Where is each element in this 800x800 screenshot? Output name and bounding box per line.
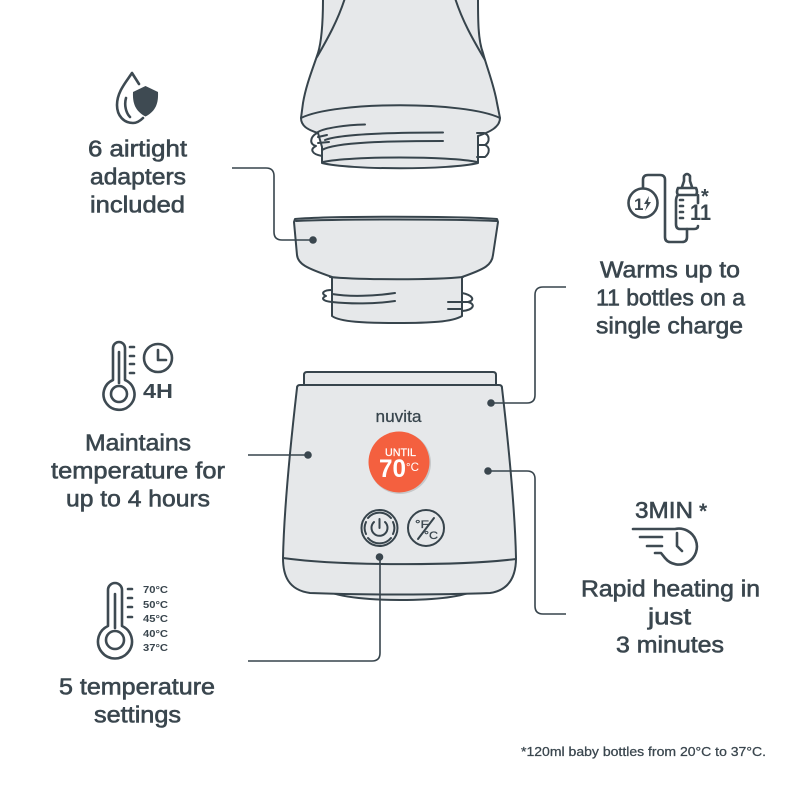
illustration: baby bottle bottom bbox=[301, 0, 500, 168]
icon: thermometer with temperatures: 70°C bbox=[143, 584, 168, 596]
icon: 3 minute rapid clock: 3MIN bbox=[635, 497, 693, 523]
icon: thermometer with clock: 4H bbox=[143, 381, 173, 403]
leader: temperature settings bbox=[248, 553, 383, 661]
text: warms up to 11 bottles: 11 bottles on a bbox=[596, 284, 745, 310]
text: warms up to 11 bottles bbox=[596, 256, 745, 338]
unit toggle button: °C bbox=[424, 530, 438, 542]
text: maintains temperature: temperature for bbox=[51, 458, 225, 484]
text: rapid heating: Rapid heating in bbox=[581, 576, 760, 602]
icon: thermometer with temperatures: 40°C bbox=[143, 628, 168, 640]
illustration: adapter bbox=[294, 217, 498, 323]
text: 5 temperature settings bbox=[59, 674, 215, 728]
power button bbox=[362, 510, 398, 546]
text: maintains temperature bbox=[51, 430, 225, 512]
text: maintains temperature: Maintains bbox=[85, 430, 191, 456]
text: 5 temperature settings: 5 temperature bbox=[59, 674, 215, 700]
icon: charge to bottles bbox=[628, 174, 711, 242]
text: rapid heating: just bbox=[647, 604, 692, 630]
text: rapid heating bbox=[581, 576, 760, 658]
icon: thermometer with temperatures: 50°C bbox=[143, 599, 168, 611]
temperature badge bbox=[368, 432, 431, 494]
unit toggle button: °F bbox=[415, 519, 429, 531]
icon: charge to bottles: * bbox=[701, 186, 709, 208]
icon: 3 minute rapid clock: * bbox=[699, 500, 708, 523]
icon: charge to bottles: 11 bbox=[690, 200, 711, 225]
text: 6 airtight adapters included: adapters bbox=[90, 164, 186, 190]
leader: rapid heating bbox=[484, 467, 566, 614]
icon: charge to bottles: 1 bbox=[634, 195, 643, 214]
leader: maintains temperature bbox=[248, 451, 312, 459]
leader: adapters bbox=[232, 168, 317, 244]
logo: nuvita: nuvita bbox=[376, 408, 422, 426]
text: 6 airtight adapters included bbox=[88, 136, 188, 218]
illustration: bottle warmer bbox=[283, 372, 516, 600]
temperature badge: 70 bbox=[379, 455, 406, 483]
icon: thermometer with temperatures bbox=[98, 583, 168, 658]
icon: thermometer with temperatures: 37°C bbox=[143, 642, 168, 654]
text: warms up to 11 bottles: single charge bbox=[596, 312, 743, 338]
text: 6 airtight adapters included: 6 airtight bbox=[88, 136, 188, 162]
text: 5 temperature settings: settings bbox=[94, 702, 181, 728]
text: maintains temperature: up to 4 hours bbox=[66, 486, 210, 512]
temperature badge: °C bbox=[406, 460, 419, 474]
text: 6 airtight adapters included: included bbox=[90, 192, 185, 218]
icon: thermometer with temperatures: 45°C bbox=[143, 613, 168, 625]
icon: 3 minute rapid clock bbox=[633, 497, 708, 565]
icon: water drop with shield bbox=[117, 73, 158, 123]
text: warms up to 11 bottles: Warms up to bbox=[600, 256, 740, 282]
footnote: *120ml baby bottles from 20°C to 37°C. bbox=[521, 745, 766, 759]
icon: thermometer with clock bbox=[103, 342, 173, 410]
unit toggle button bbox=[408, 510, 444, 546]
temperature badge: UNTIL bbox=[385, 447, 416, 459]
leader: single charge bbox=[487, 287, 566, 407]
text: rapid heating: 3 minutes bbox=[616, 632, 724, 658]
